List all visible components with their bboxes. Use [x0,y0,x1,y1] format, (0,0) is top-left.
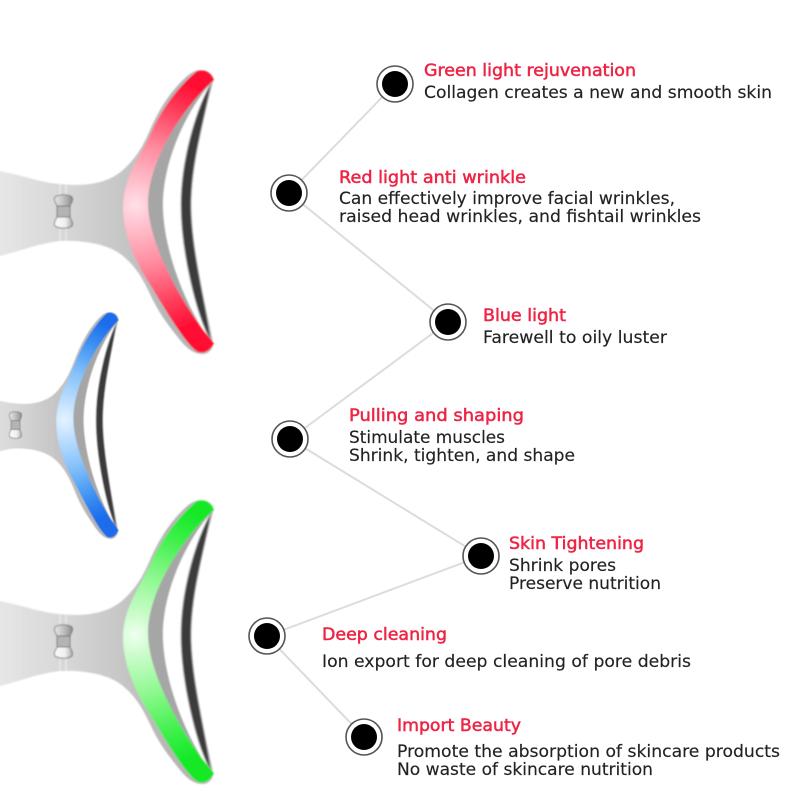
marker [430,304,466,340]
heading: Pulling and shaping [349,406,524,425]
handle seam [60,184,66,241]
description [339,189,701,227]
heading: Skin Tightening [509,534,644,553]
feature: blue light [430,304,667,348]
white outer edge [104,322,136,529]
control button [54,625,73,658]
marker [463,538,499,574]
device: green light [0,500,240,784]
feature: pulling and shaping [272,406,575,466]
feature: red light anti wrinkle [271,168,701,227]
feature: import beauty [346,716,780,780]
handle seam [60,614,66,671]
inner grey strip [73,320,119,530]
metal contact band [181,513,211,771]
white outer edge [192,82,240,342]
device: blue light [0,312,136,539]
connector lines [267,84,481,636]
feature: deep cleaning [249,618,691,672]
white opening [84,323,117,528]
heading: Import Beauty [397,716,521,735]
marker [249,618,285,654]
description: Can effectively improve facial wrinkles, [339,189,675,209]
description: Farewell to oily luster [483,328,667,348]
description: No waste of skincare nutrition [397,760,653,780]
metal contact band [181,83,211,341]
description [509,556,661,594]
heading: Deep cleaning [322,625,447,644]
feature: green light rejuvenation [377,61,772,103]
description: Preserve nutrition [509,574,661,594]
control button [54,195,73,228]
light strip [123,500,214,783]
heading: Green light rejuvenation [424,61,636,80]
description [349,428,575,466]
description [397,742,780,780]
inner grey strip [148,80,214,343]
feature: skin tightening [463,534,661,594]
device body [0,500,214,784]
device: red light [0,70,240,354]
device body [0,312,118,539]
light strip [56,312,119,538]
device body [0,70,214,354]
white opening [163,83,211,341]
heading: Blue light [483,306,567,325]
metal contact band [96,323,117,528]
description: Promote the absorption of skincare products [397,742,780,762]
marker [271,175,307,211]
inner grey strip [148,510,214,773]
description: Stimulate muscles [349,428,505,448]
marker [377,66,413,102]
control button [9,412,22,438]
connector line: deep cleaning to import beauty [267,636,364,737]
heading: Red light anti wrinkle [339,168,526,187]
light strip [123,70,214,353]
marker [346,719,382,755]
white opening [163,513,211,771]
description: Collagen creates a new and smooth skin [424,83,772,103]
description: Shrink pores [509,556,616,576]
description: Ion export for deep cleaning of pore debris [322,652,691,672]
white outer edge [192,512,240,772]
description: raised head wrinkles, and fishtail wrinkles [339,207,701,227]
description: Shrink, tighten, and shape [349,446,575,466]
marker [272,421,308,457]
